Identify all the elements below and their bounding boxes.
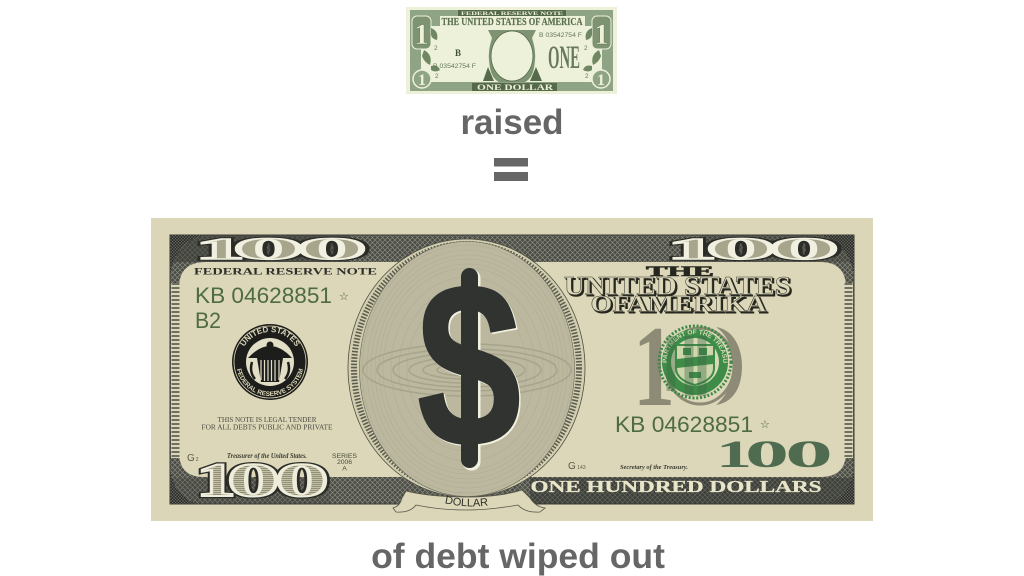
secretary signature line: Secretary of the Treasury. (620, 464, 688, 471)
green treasury seal: DEPARTMENT OF THE TREASURY (662, 330, 728, 363)
top right numeral 100: 0 (769, 231, 839, 266)
small bill left corner ones: 1 (414, 18, 429, 51)
one hundred dollars band text: ONE HUNDRED DOLLARS (530, 477, 822, 496)
small bill left corner ones (412, 16, 440, 89)
watermark digit one: 1 (633, 303, 675, 431)
left G mark: G2 (187, 453, 199, 464)
oval outer ring (348, 239, 585, 497)
federal reserve seal: FEDERAL RESERVE SYSTEM (236, 368, 304, 396)
bottom left numeral 100 (196, 454, 329, 507)
watermark second zero (716, 327, 742, 405)
word: raised: raised (460, 103, 564, 142)
bill dark frame (170, 235, 854, 504)
green numeral 100: 0 (785, 433, 833, 476)
right beaded edge (843, 283, 853, 458)
left beaded edge (171, 283, 181, 458)
green numeral 100: 1 (716, 433, 752, 476)
title line UNITED STATES: UNITED STATES (566, 273, 792, 302)
legal tender statement: THIS NOTE IS LEGAL TENDER (218, 415, 316, 424)
small bill top heading band: FEDERAL RESERVE NOTE (461, 11, 563, 17)
small bill letter B and serials: 2 (585, 73, 589, 80)
small bill right corner ones: 1 (597, 72, 605, 89)
treasurer signature line: Treasurer of the United States. (227, 452, 307, 460)
equals sign (494, 158, 528, 181)
top left numeral 100: 1 (195, 231, 245, 266)
bottom left numeral 100: 1 (196, 454, 236, 507)
small bill letter B and serials: B 03542754 F (539, 32, 582, 39)
green numeral 100 (716, 433, 833, 476)
dollar sign highlight: $ (418, 234, 522, 498)
small bill bottom band (472, 83, 557, 92)
watermark overprint on seal (671, 336, 702, 396)
right star: ☆ (760, 419, 770, 431)
federal reserve seal (232, 324, 308, 400)
small one dollar bill: ONE (548, 40, 580, 76)
dollar sign: $ (417, 233, 521, 496)
central oval (348, 233, 585, 498)
small bill letter B and serials (433, 32, 589, 80)
united states of america title (564, 264, 792, 318)
small bill paper (406, 7, 617, 94)
small bill bottom band: ONE DOLLAR (477, 83, 553, 92)
top left numeral 100: 1 (195, 231, 245, 266)
left B2 code: B2 (195, 308, 221, 333)
top left numeral 100: 0 (297, 231, 367, 266)
small one dollar bill (406, 7, 617, 94)
green treasury seal (658, 324, 732, 400)
top right numeral 100: 0 (706, 231, 776, 266)
seal eagle and shield (248, 342, 292, 382)
federal reserve note heading: FEDERAL RESERVE NOTE (194, 266, 377, 276)
bottom left numeral 100: 0 (275, 454, 329, 507)
bill paper (151, 218, 873, 521)
top right numeral 100: 0 (706, 231, 776, 266)
series label (332, 453, 357, 472)
small bill left corner ones: 1 (418, 72, 426, 89)
bill cream centre panel (179, 262, 846, 477)
title line OF AMERIKA: OFAMERIKA (592, 293, 768, 318)
bottom left numeral 100: 0 (227, 454, 280, 507)
top right numeral 100: 1 (667, 231, 717, 266)
top left numeral 100 (195, 231, 367, 266)
top left numeral 100: 0 (233, 231, 304, 266)
top right numeral 100: 1 (667, 231, 717, 266)
small bill inner panel (421, 16, 602, 82)
top left numeral 100: 0 (233, 231, 304, 266)
top right numeral 100: 0 (769, 231, 839, 266)
small bill right corner ones: 1 (594, 18, 609, 51)
small bill letter B and serials: 2 (435, 73, 439, 80)
bottom left numeral 100: 0 (275, 454, 329, 507)
small bill letter B and serials: 2 (434, 45, 438, 52)
right serial number: KB 04628851 (615, 412, 753, 437)
small bill title: THE UNITED STATES OF AMERICA (442, 17, 583, 28)
oval moire rings (363, 344, 571, 396)
title line OF AMERIKA: OFAMERIKA (590, 292, 767, 316)
large hundred dollar bill (151, 218, 873, 521)
small bill letter B and serials: B (455, 48, 461, 58)
watermark zero (666, 328, 734, 404)
ribbon word DOLLAR: DOLLAR (445, 496, 488, 506)
right G mark: G 143 (568, 461, 586, 472)
title word THE: THE (646, 264, 714, 280)
left star: ☆ (339, 291, 349, 303)
green numeral 100: 0 (745, 433, 789, 476)
small bill frame (410, 10, 613, 91)
series label: SERIES (332, 453, 357, 460)
small bill letter B and serials: B 03542754 F (433, 63, 476, 70)
caption: of debt wiped out: of debt wiped out (371, 536, 665, 576)
small bill top heading band (458, 10, 566, 17)
series label: A (342, 466, 347, 472)
small bill right corner ones (583, 16, 611, 89)
left serial number: KB 04628851 (195, 283, 332, 308)
small bill letter B and serials: 2 (584, 45, 588, 52)
top right numeral 100 (667, 231, 839, 266)
bottom left numeral 100: 1 (196, 454, 236, 507)
title line UNITED STATES: UNITED STATES (564, 272, 791, 300)
seal ring wording: UNITED STATES (240, 326, 300, 346)
treasury seal watermark 100 (633, 303, 742, 431)
legal tender statement: FOR ALL DEBTS PUBLIC AND PRIVATE (202, 422, 333, 432)
dollar ribbon banner (392, 490, 546, 512)
oval engraving lines (362, 245, 572, 493)
top left numeral 100: 0 (297, 231, 367, 266)
oval engraved field (360, 242, 574, 496)
legal tender statement (202, 415, 333, 432)
small bill portrait oval (483, 30, 542, 82)
bottom left numeral 100: 0 (227, 454, 280, 507)
series label: 2006 (337, 459, 352, 466)
